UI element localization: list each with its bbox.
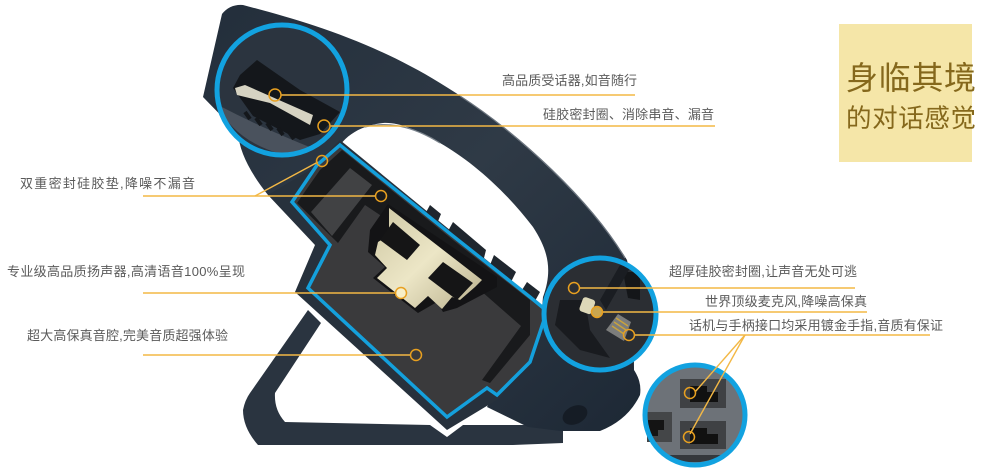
label: thick seal: 超厚硅胶密封圈,让声音无处可逃 <box>669 264 857 279</box>
stand and base <box>243 310 563 445</box>
label: silicone seal: 硅胶密封圈、消除串音、漏音 <box>543 107 714 122</box>
callout markers <box>269 89 696 442</box>
handset <box>203 5 640 431</box>
upper grey block <box>311 168 372 236</box>
upper dark compartment <box>297 150 530 383</box>
speaker <box>368 204 497 313</box>
label: double seal: 双重密封硅胶垫,降噪不漏音 <box>20 176 195 191</box>
leader lines <box>143 95 930 434</box>
title line 2: 的对话感觉 <box>846 105 976 133</box>
phone illustration <box>203 5 656 445</box>
label: receiver: 高品质受话器,如音随行 <box>502 73 637 88</box>
label: speaker: 专业级高品质扬声器,高清语音100%呈现 <box>7 264 245 279</box>
top detail circle <box>217 25 347 155</box>
speaker cavity lower <box>428 262 473 300</box>
title box <box>839 24 976 162</box>
handset foot recess <box>559 401 591 429</box>
label: microphone: 世界顶级麦克风,降噪高保真 <box>705 294 867 309</box>
inset circle: connector ports <box>645 365 745 465</box>
speaker cone <box>375 208 482 309</box>
speaker cavity upper <box>380 222 420 260</box>
label: chamber: 超大高保真音腔,完美音质超强体验 <box>27 328 228 343</box>
title line 1: 身临其境 <box>846 60 976 96</box>
acoustic chamber <box>292 145 547 417</box>
body shell <box>268 140 550 430</box>
handset outer highlight <box>460 96 625 258</box>
handset inner highlight <box>365 125 440 143</box>
bottom right detail circle <box>544 258 656 370</box>
button bumps <box>424 205 540 301</box>
speaker frame <box>368 204 497 313</box>
label: gold contacts: 话机与手柄接口均采用镀金手指,音质有保证 <box>689 318 943 333</box>
